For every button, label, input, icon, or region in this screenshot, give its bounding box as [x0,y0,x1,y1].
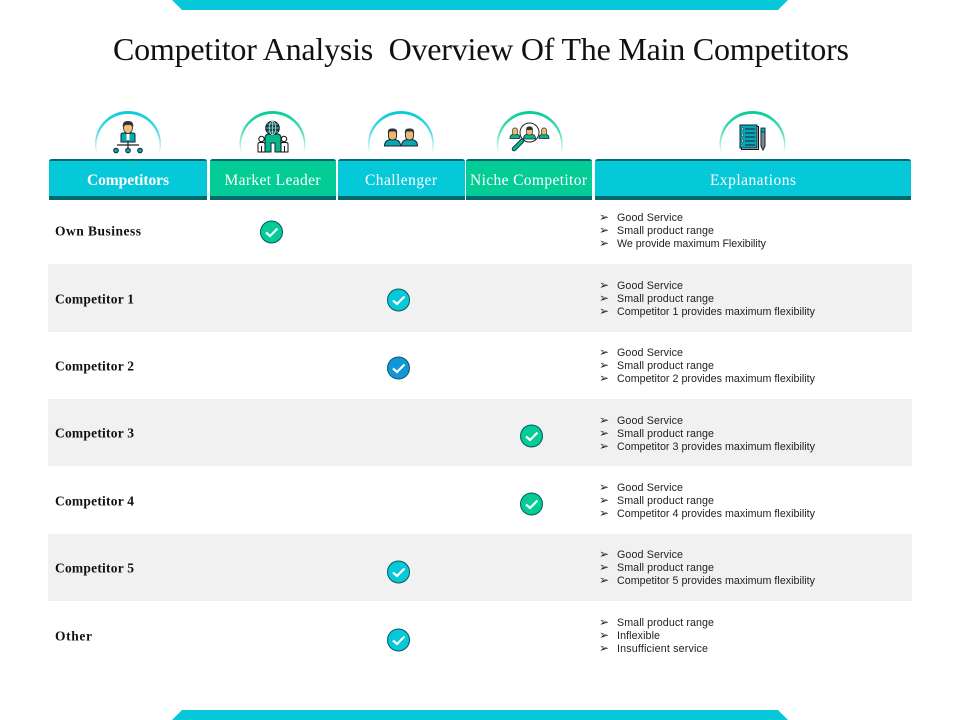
row: Other [55,615,714,655]
explanation list: Small product range [617,562,714,574]
row label: Competitor 3 [55,426,134,440]
row: Competitor 3 [48,399,912,466]
explanation list: ➢ [599,426,609,440]
check mark [520,425,542,447]
explanation list: Small product range [617,293,714,305]
explanation list: ➢ [599,371,609,385]
row label: Competitor 2 [55,358,134,374]
explanation list: We provide maximum Flexibility [617,238,767,250]
explanation list: ➢ [599,291,609,305]
explanation list: ➢ [599,236,609,250]
arc [240,111,306,155]
explanation list: ➢ [599,615,609,629]
column header: Niche Competitor [466,111,592,200]
explanation list: Good Service [617,549,683,561]
column header: Explanations [595,111,911,200]
row label: Competitor 5 [55,560,134,576]
explanation list [599,615,714,655]
header label: Niche Competitor [470,172,588,189]
header tab [466,159,592,200]
row: Competitor 1 [48,264,912,332]
title: Competitor Analysis Overview Of The Main Competitors [113,31,849,67]
header tab [210,159,336,200]
explanation list: Insufficient service [617,643,708,655]
explanation list: Good Service [617,415,683,427]
arc [497,111,563,155]
row: Competitor 5 [48,534,912,601]
header label: Market Leader [224,172,321,189]
explanation list: Good Service [617,347,683,359]
check mark [388,629,410,651]
explanation list: ➢ [599,413,609,427]
header label: Challenger [365,172,438,189]
row label: Competitor 4 [55,494,134,508]
header tab [49,159,207,200]
row: Competitor 4 [55,480,816,520]
explanation list: Competitor 3 provides maximum flexibility [617,441,816,453]
arc [720,111,786,155]
check mark [388,561,410,583]
explanation list [599,345,816,385]
explanation list: Inflexible [617,630,660,642]
row label: Other [55,628,92,644]
explanation list [599,480,816,520]
explanation list: Competitor 4 provides maximum flexibility [617,508,816,520]
row background [48,534,912,601]
explanation list: Good Service [617,280,683,292]
check mark [388,357,410,379]
explanation list: Competitor 2 provides maximum flexibility [617,373,816,385]
header label: Explanations [710,172,796,189]
icon: magnifier over people [510,123,549,149]
explanation list: ➢ [599,439,609,453]
top accent bar [172,0,788,10]
explanation list: Small product range [617,428,714,440]
header tab [338,159,465,200]
explanation list: ➢ [599,278,609,292]
row background [48,399,912,466]
column header: Challenger [338,111,465,200]
row label: Competitor 1 [55,292,134,306]
explanation list: Small product range [617,617,714,629]
explanation list: Good Service [617,482,683,494]
explanation list: ➢ [599,223,609,237]
row background [48,264,912,332]
explanation list [599,210,767,250]
column header: Market Leader [210,111,336,200]
explanation list: ➢ [599,358,609,372]
icon: checklist and pen [740,125,765,150]
explanation list: ➢ [599,493,609,507]
explanation list: Small product range [617,360,714,372]
arc [95,111,161,155]
explanation list: ➢ [599,345,609,359]
row: Competitor 2 [55,345,816,385]
explanation list [599,547,816,587]
row label: Own Business [55,224,141,238]
column header: Competitors [49,111,207,200]
explanation list: Competitor 1 provides maximum flexibility [617,306,816,318]
header tab [595,159,911,200]
arc [368,111,434,155]
explanation list: ➢ [599,641,609,655]
explanation list: ➢ [599,506,609,520]
explanation list: ➢ [599,480,609,494]
header label: Competitors [87,172,169,189]
explanation list: ➢ [599,560,609,574]
icon: person with network [114,121,142,153]
explanation list: Small product range [617,495,714,507]
explanation list: ➢ [599,573,609,587]
explanation list: ➢ [599,628,609,642]
explanation list: ➢ [599,210,609,224]
icon: leader with globe [258,121,288,152]
bottom accent bar [172,710,788,720]
row: Own Business [55,210,767,250]
check mark [260,221,282,243]
explanation list: Small product range [617,225,714,237]
check mark [520,493,542,515]
explanation list: Good Service [617,212,683,224]
explanation list [599,413,816,453]
explanation list: ➢ [599,547,609,561]
explanation list [599,278,816,318]
explanation list: ➢ [599,304,609,318]
check mark [388,289,410,311]
explanation list: Competitor 5 provides maximum flexibility [617,575,816,587]
icon: two people [384,128,418,146]
